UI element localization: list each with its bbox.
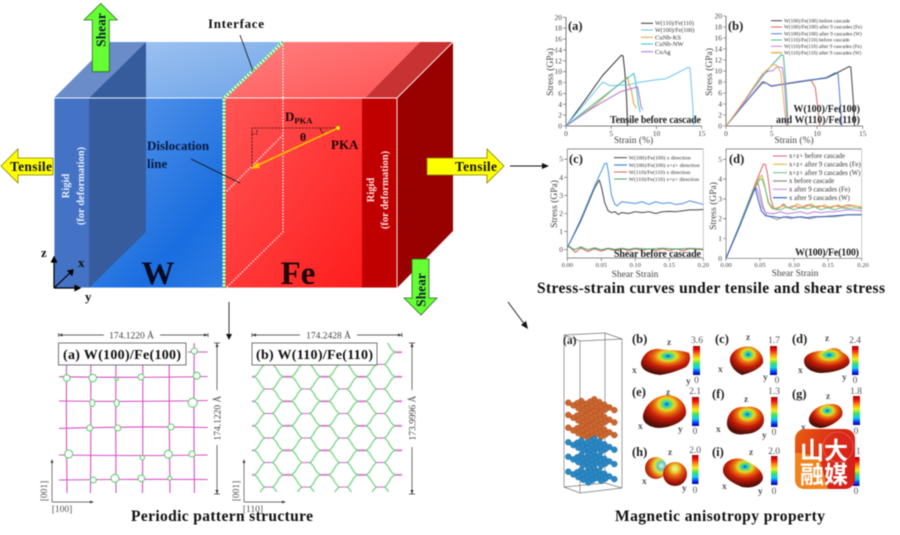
y ticks: 2	[559, 209, 563, 218]
y ticks: 3	[718, 194, 722, 203]
y ticks: 2	[558, 111, 562, 120]
legend: CuNb-KS	[655, 34, 681, 41]
axis titles: Stress (GPa)	[708, 182, 719, 230]
curves	[567, 163, 703, 252]
y ticks: 12	[714, 56, 722, 64]
panel: magnetic anisotropy (c): 0	[775, 376, 780, 386]
width dimension	[252, 330, 402, 342]
panel: magnetic anisotropy (b): y	[686, 377, 691, 387]
panel: magnetic anisotropy (d): z	[825, 334, 830, 344]
curves	[566, 55, 694, 126]
y ticks: 6	[558, 89, 562, 98]
axis titles: Strain (%)	[614, 135, 653, 146]
x ticks: 10	[653, 129, 660, 138]
panel: magnetic anisotropy (c)	[715, 332, 780, 386]
crystal axes	[232, 459, 286, 515]
Fe front face	[224, 98, 363, 288]
W atoms	[565, 436, 617, 486]
chart (a): tensile before cascade	[545, 13, 706, 146]
y ticks	[718, 155, 722, 263]
panel: magnetic anisotropy (d): (d)	[792, 332, 807, 346]
legend: x before cascade	[789, 178, 834, 185]
title box: (b) W(110)/Fe(110)	[256, 348, 373, 363]
curves	[726, 54, 854, 126]
panel: magnetic anisotropy (h): y	[682, 484, 687, 494]
legend: W(100)/Fe(100) before cascade	[784, 17, 851, 24]
panel: magnetic anisotropy (b): 3.6	[691, 336, 703, 346]
panel letter: (b)	[728, 19, 743, 33]
arrow: to periodic patterns	[226, 302, 232, 340]
chart (d): W(100)/Fe(100) cascades	[708, 149, 869, 279]
legend: W(100)/Fe(100) after 9 cascades (Fe)	[784, 24, 862, 31]
legend: x+z+ before cascade	[789, 153, 845, 160]
Fe atoms	[565, 396, 617, 442]
Fe rigid top	[365, 42, 453, 98]
x ticks	[564, 129, 706, 138]
arrow: shear down: Shear	[414, 273, 428, 307]
y ticks	[559, 155, 563, 254]
interface dotted line	[224, 42, 283, 288]
panel: magnetic anisotropy (f)	[712, 387, 780, 441]
arrow: tensile left	[1, 149, 53, 183]
panel: magnetic anisotropy (i)	[712, 445, 780, 497]
label: left rigid	[61, 146, 87, 225]
arrow: shear up	[84, 4, 117, 72]
axis titles: Stress (GPa)	[545, 48, 556, 96]
panel: magnetic anisotropy (b): x	[632, 366, 637, 376]
panel: magnetic anisotropy (d): 2.4	[849, 336, 861, 346]
logo: 山大融媒 watermark: 大	[824, 438, 848, 465]
heading: stress-strain curves: Stress-strain curves under tensile and shear stress	[537, 280, 885, 297]
panel: magnetic anisotropy (i): x	[722, 482, 727, 492]
panel: W/Fe bicrystal simulation box	[41, 16, 453, 304]
legend	[771, 17, 862, 56]
legend: x after 9 cascades (Fe)	[789, 186, 850, 194]
y ticks: 16	[554, 35, 562, 44]
panel: magnetic anisotropy (e): (e)	[632, 385, 646, 399]
panel: magnetic anisotropy (c): y	[763, 373, 768, 383]
width dimension: 174.1220 Å	[109, 330, 154, 342]
panel: magnetic anisotropy (f): 0	[772, 428, 777, 438]
panel: magnetic anisotropy (f): y	[762, 431, 767, 441]
label: Interface with leader: Interface	[208, 16, 264, 31]
PKA geometry: D	[285, 109, 294, 124]
y ticks: 10	[714, 66, 722, 76]
coordinate axes	[41, 245, 92, 304]
panel letter: (d)	[729, 152, 744, 166]
label: Interface with leader	[208, 16, 264, 71]
x ticks: 0.10	[630, 262, 641, 269]
legend: W(110)/Fe(110) after 9 cascades (Fe)	[784, 43, 862, 50]
panel letter: (a)	[568, 19, 583, 33]
panel letter: (a)	[563, 335, 577, 347]
height dimension: 173.9996 Å	[406, 395, 418, 440]
coordinate axes: y	[85, 289, 92, 304]
y ticks	[554, 13, 562, 130]
panel: atomic model (a)	[563, 333, 622, 493]
logo: 山大融媒 watermark: 媒	[824, 462, 848, 489]
y ticks: 14	[714, 44, 722, 54]
panel: (a) W(100)/Fe(100) pattern	[40, 330, 224, 515]
x ticks: 0.20	[698, 262, 709, 269]
dislocation net	[252, 343, 402, 492]
box edges	[54, 42, 453, 288]
y ticks: 10	[554, 67, 562, 76]
W left rigid top	[54, 42, 146, 98]
arrow: shear up: Shear	[94, 13, 108, 47]
panel: magnetic anisotropy (b): (b)	[632, 332, 647, 346]
y ticks: 0	[718, 122, 722, 130]
x ticks: 10	[813, 129, 821, 138]
y ticks: 20	[714, 12, 722, 20]
arrow: shear down	[404, 259, 437, 315]
panel: magnetic anisotropy (e): x	[638, 422, 643, 432]
panel: magnetic anisotropy (g): 1.8	[850, 387, 862, 397]
panel: magnetic anisotropy (g): z	[826, 392, 831, 402]
panel: magnetic anisotropy (d): y	[842, 373, 847, 383]
y ticks	[714, 12, 722, 130]
legend: W(110)/Fe(110)	[655, 20, 694, 27]
legend: CuAg	[655, 49, 671, 56]
panel: magnetic anisotropy (b): z	[667, 338, 672, 348]
coordinate axes: x	[78, 255, 85, 270]
y ticks: 14	[554, 45, 562, 54]
caption: W(100)/Fe(100)	[795, 248, 859, 259]
y ticks: 3	[559, 191, 563, 200]
height dimension	[406, 343, 418, 494]
label: Dislocation line with leader: Dislocation	[147, 138, 210, 153]
panel: magnetic anisotropy (e): 0	[693, 427, 698, 437]
interface green dots	[224, 42, 283, 288]
axis titles	[704, 48, 814, 146]
crystal axes: [100]	[52, 505, 72, 515]
axis titles: Shear Strain	[612, 270, 659, 280]
panel: magnetic anisotropy (c): x	[718, 365, 723, 375]
x ticks: 0.05	[596, 262, 607, 269]
axis titles: Strain (%)	[774, 135, 814, 146]
arrow: tensile right	[427, 149, 504, 183]
panel: magnetic anisotropy (i): 2.0	[768, 447, 780, 457]
legend	[773, 153, 861, 202]
panel: magnetic anisotropy (h): 0	[693, 486, 698, 496]
curves	[726, 164, 862, 258]
panel: magnetic anisotropy (j) colour bar	[853, 447, 861, 497]
caption	[776, 104, 860, 126]
legend: x+z+ after 9 cascades (Fe)	[789, 162, 861, 168]
x ticks: 0.15	[822, 262, 834, 269]
legend: x+z+ after 9 cascades (W)	[789, 170, 860, 177]
panel: magnetic anisotropy (i): z	[749, 448, 754, 458]
dislocation plane dotted	[226, 42, 283, 288]
PKA geometry: PKA	[331, 137, 359, 152]
x ticks: 0.10	[788, 262, 800, 269]
caption: Shear before cascade	[614, 249, 702, 260]
caption: Tensile before cascade	[610, 115, 702, 126]
coordinate axes: z	[41, 245, 47, 260]
axis titles	[708, 182, 819, 279]
y ticks: 8	[558, 78, 562, 87]
y ticks: 16	[714, 34, 722, 42]
y ticks: 5	[559, 155, 563, 164]
height dimension	[212, 343, 224, 494]
panel: magnetic anisotropy (b)	[632, 332, 703, 387]
y ticks: 4	[558, 100, 562, 109]
y ticks: 0	[558, 122, 562, 130]
x ticks: 5	[609, 129, 613, 138]
panel: magnetic anisotropy (j) colour bar: .1	[853, 447, 861, 457]
width dimension: 174.2428 Å	[306, 330, 351, 342]
heading: periodic pattern structure: Periodic pattern structure	[131, 508, 313, 525]
x ticks: 5	[770, 129, 774, 138]
y ticks: 1	[718, 234, 722, 243]
logo: 山大融媒 watermark: 融	[800, 462, 824, 489]
y ticks: 8	[718, 78, 722, 86]
chart (b): W(100)/Fe(100) and W(110)/Fe(110)	[704, 12, 867, 146]
x ticks: 0.00	[720, 262, 732, 269]
Fe right face	[397, 42, 453, 288]
y ticks: 4	[718, 100, 722, 108]
label: Fe: Fe	[281, 256, 315, 292]
panel: magnetic anisotropy (c): (c)	[715, 332, 729, 346]
x ticks: 15	[698, 129, 706, 138]
arrow: tensile left: Tensile	[10, 159, 52, 174]
panel: magnetic anisotropy (g): x	[801, 423, 806, 433]
PKA geometry: PKA	[294, 116, 313, 126]
x ticks: 0.05	[754, 262, 766, 269]
legend: W(100)/Fe(100) x direction	[629, 154, 691, 162]
height dimension: 174.1220 Å	[212, 395, 224, 440]
x ticks: 0.00	[562, 262, 573, 269]
panel: magnetic anisotropy (e): y	[678, 425, 683, 435]
y ticks: 4	[718, 175, 722, 184]
axis titles	[545, 48, 653, 146]
x ticks: 0	[724, 129, 728, 138]
panel: magnetic anisotropy (e)	[632, 385, 701, 437]
crystal axes: [110]	[243, 505, 263, 515]
panel: magnetic anisotropy (i): (i)	[712, 445, 724, 459]
legend: W(110)/Fe(110) after 9 cascades (W)	[784, 49, 862, 56]
label: right rigid	[366, 150, 391, 229]
width dimension	[58, 330, 208, 342]
arrow: to magnetic anisotropy	[508, 302, 528, 329]
panel: magnetic anisotropy (h)	[632, 445, 701, 496]
panel: magnetic anisotropy (g)	[792, 387, 862, 437]
y ticks: 0	[718, 254, 722, 263]
label: right rigid: Rigid	[366, 178, 377, 202]
y ticks: 5	[718, 155, 722, 164]
x ticks	[720, 262, 869, 269]
label: left rigid: Rigid	[61, 174, 72, 198]
panel: magnetic anisotropy (f): x	[716, 425, 721, 435]
W left rigid front	[54, 98, 89, 288]
panel: magnetic anisotropy (h): x	[642, 477, 647, 487]
y ticks: 0	[559, 245, 563, 254]
y ticks: 4	[559, 173, 563, 182]
legend: W(110)/Fe(110) x direction	[629, 169, 691, 176]
panel: magnetic anisotropy (h): (h)	[632, 445, 647, 459]
heading: magnetic anisotropy property: Magnetic anisotropy property	[615, 508, 825, 525]
W top face	[89, 42, 283, 98]
panel: magnetic anisotropy (f): z	[744, 395, 749, 405]
y ticks: 6	[718, 88, 722, 98]
x ticks: 0.15	[664, 262, 675, 269]
legend: W(100)/Fe(100)	[655, 27, 694, 34]
panel: magnetic anisotropy (b): 0	[694, 376, 699, 386]
x ticks: 15	[859, 129, 867, 138]
y ticks: 18	[554, 24, 562, 33]
axis titles: Shear Strain	[772, 269, 819, 279]
Fe top face	[224, 42, 420, 98]
panel: magnetic anisotropy (g): 0	[854, 427, 859, 437]
panel: magnetic anisotropy (g): (g)	[792, 387, 807, 401]
panel: magnetic anisotropy (e): 2.1	[689, 387, 701, 397]
panel: magnetic anisotropy (d): 0	[853, 376, 858, 386]
axis titles: Stress (GPa)	[549, 180, 560, 228]
legend: x after 9 cascades (W)	[789, 195, 850, 202]
panel: magnetic anisotropy (f): 1.3	[768, 387, 780, 397]
title box: (a) W(100)/Fe(100)	[63, 348, 181, 363]
logo: 山大融媒 watermark: 山	[800, 438, 824, 465]
panel: magnetic anisotropy (c): z	[746, 333, 751, 343]
axis titles: Stress (GPa)	[704, 48, 715, 96]
panel: (b) W(110)/Fe(110) pattern	[232, 330, 418, 515]
legend: W(100)/Fe(100) after 9 cascades (W)	[784, 30, 862, 37]
x ticks	[724, 129, 867, 138]
x ticks: 0.20	[857, 262, 869, 269]
legend	[641, 20, 694, 56]
y ticks: 20	[554, 13, 562, 22]
W front face	[54, 98, 224, 288]
y ticks: 12	[554, 56, 562, 65]
panel: magnetic anisotropy (f): (f)	[712, 387, 724, 401]
panel: magnetic anisotropy (d)	[792, 332, 861, 386]
legend: W(110)/Fe(110) before cascade	[784, 37, 850, 44]
Fe rigid front	[362, 98, 397, 288]
label: left rigid: (for deformation)	[76, 146, 87, 225]
panel: magnetic anisotropy (h): z	[668, 448, 673, 458]
label: W: W	[142, 256, 174, 292]
axis titles	[549, 180, 659, 280]
label: Dislocation line with leader	[147, 138, 240, 183]
crystal axes	[40, 459, 94, 515]
wireframe back	[564, 333, 622, 493]
y ticks: 2	[718, 110, 722, 120]
y ticks: 2	[718, 214, 722, 223]
title box	[58, 343, 186, 365]
caption: and W(110)/Fe(110)	[776, 115, 860, 126]
crystal axes: [001]	[40, 481, 50, 501]
chart (c): shear before cascade	[549, 149, 709, 280]
label: Dislocation line with leader: line	[147, 156, 167, 171]
panel: magnetic anisotropy (d): x	[798, 366, 803, 376]
legend: W(110)/Fe(110) x+z+ direction	[629, 176, 699, 183]
panel: magnetic anisotropy (e): z	[666, 388, 671, 398]
label: right rigid: (for deformation)	[380, 150, 391, 229]
green loops	[63, 348, 200, 483]
W left rigid inner slab	[89, 42, 146, 288]
arrow: tensile right: Tensile	[455, 159, 497, 174]
x ticks: 0	[564, 129, 568, 138]
logo: 山大融媒 watermark	[795, 429, 855, 489]
x ticks	[562, 262, 709, 269]
title box	[252, 343, 377, 365]
y ticks: 1	[559, 227, 563, 236]
PKA geometry: θ	[300, 130, 306, 144]
panel: magnetic anisotropy (c): 1.7	[768, 336, 780, 346]
panel: magnetic anisotropy (j) colour bar: 0	[854, 487, 859, 497]
panel letter: (c)	[569, 152, 583, 166]
panel: magnetic anisotropy (i): 0	[772, 487, 777, 497]
panel: magnetic anisotropy (h): 2.0	[689, 446, 701, 456]
y ticks: 18	[714, 22, 722, 32]
arrow: to stress-strain charts	[510, 163, 549, 169]
caption: W(100)/Fe(100)	[793, 104, 860, 115]
crystal axes: [001]	[232, 481, 242, 501]
legend: CuNb-NW	[655, 41, 684, 48]
panel: magnetic anisotropy (i): y	[758, 487, 763, 497]
legend	[614, 154, 700, 183]
PKA geometry	[250, 109, 359, 169]
misfit grid lines	[59, 343, 208, 493]
legend: W(100)/Fe(100) x+z+ direction	[629, 162, 700, 169]
